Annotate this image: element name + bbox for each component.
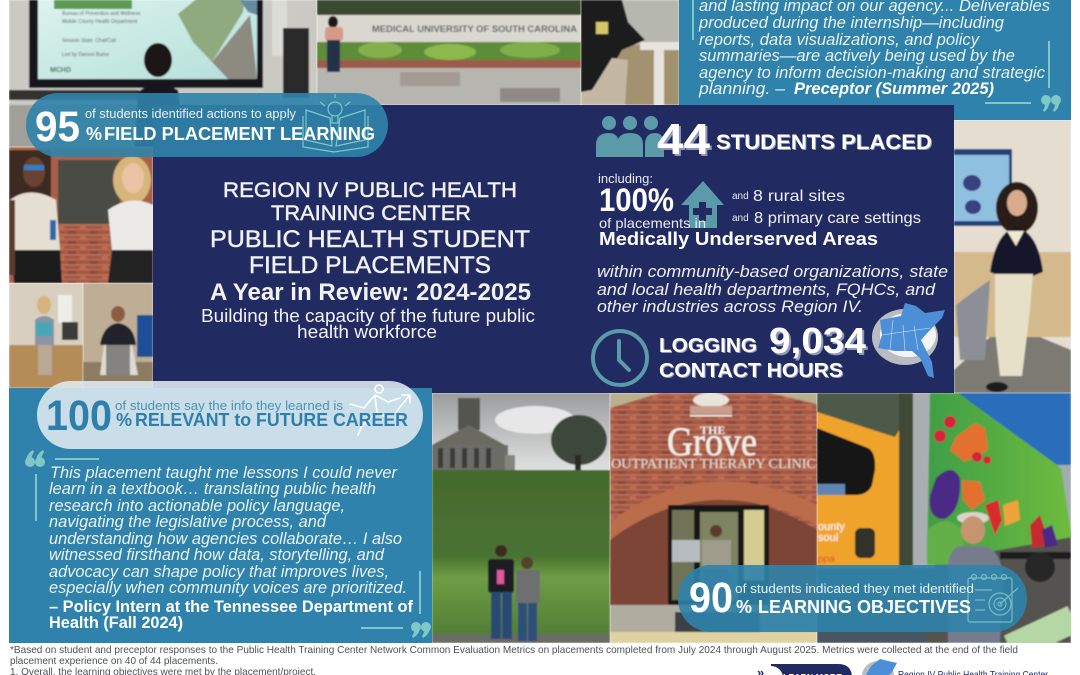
title block: FIELD PLACEMENTS — [249, 252, 491, 279]
stat: 9,034 contact hours: CONTACT HOURS — [659, 360, 843, 382]
title block: health workforce — [297, 322, 437, 342]
text: placement settings: within community-based organizations, state — [597, 262, 948, 281]
photo: woman at an information table — [83, 283, 153, 388]
photo: vegetable mural truck and student — [817, 393, 1071, 643]
stat: 9,034 contact hours — [593, 320, 866, 385]
panel: navy stats and title — [153, 105, 954, 393]
quote text: policy intern: research into actionable policy language, — [49, 496, 345, 515]
panel: student quote — [9, 388, 432, 643]
pill: 90% learning objectives: % — [736, 597, 752, 617]
quote attribution — [49, 597, 413, 632]
quote text: policy intern: understanding how agencies collaborate… I also — [49, 529, 402, 548]
panel: preceptor quote — [679, 0, 1071, 120]
stat: 100% in medically underserved areas: Medically Underserved Areas — [599, 229, 878, 249]
pill: 90% learning objectives: 90 — [689, 574, 733, 622]
photo: student beside a wall screen — [954, 120, 1071, 393]
quote marks and rules — [692, 0, 1061, 112]
pill: 100% relevant to future career — [37, 381, 423, 449]
quote text: preceptor — [698, 0, 1050, 98]
pill: 95% field placement learning: of students identified actions to apply — [85, 106, 296, 121]
photo: Medical University of South Carolina sign: MEDICAL UNIVERSITY OF SOUTH CAROLINA — [372, 24, 578, 34]
pill: 90% learning objectives: of students indicated they met identified — [735, 581, 974, 596]
photo: vegetable mural truck and student: soul — [818, 532, 838, 544]
quote text: preceptor: produced during the internship—including — [698, 13, 1005, 32]
photo: Medical University of South Carolina sign — [317, 0, 581, 105]
photo: presenter in front of a projection screen: Mobile County Health Department — [62, 19, 138, 25]
quote text: preceptor: agency to inform decision-making and strategic — [699, 63, 1045, 82]
stat: 44 students placed: 44 — [657, 115, 711, 164]
stat: 9,034 contact hours: LOGGING — [659, 335, 757, 357]
pill: 100% relevant to future career: of students say the info they learned is — [115, 398, 344, 413]
title block: TRAINING CENTER — [271, 201, 471, 225]
quote text: policy intern: especially when community voices are prioritized. — [49, 578, 407, 597]
quote text: preceptor: planning. – — [698, 79, 786, 98]
pill: 100% relevant to future career: % — [116, 410, 132, 430]
photo: vegetable mural truck and student: ppa — [817, 554, 835, 565]
text: placement settings: and local health departments, FQHCs, and — [597, 280, 936, 299]
quote text: policy intern: learn in a textbook… translating public health — [49, 479, 376, 498]
stat: 44 students placed: STUDENTS PLACED — [716, 131, 932, 154]
quote text: policy intern — [49, 463, 407, 597]
quote text: policy intern: navigating the legislative process, and — [49, 512, 327, 531]
stat: 9,034 contact hours: 9,034 — [769, 320, 866, 361]
icon: runner climbing with arrow — [350, 385, 410, 435]
quote text: preceptor: Preceptor (Summer 2025) — [794, 79, 994, 98]
pill: 100% relevant to future career: RELEVANT to FUTURE CAREER — [135, 410, 408, 430]
quote text: policy intern: This placement taught me lessons I could never — [50, 463, 398, 482]
pill: 95% field placement learning — [26, 93, 388, 157]
icon: checklist with target — [968, 574, 1018, 622]
icon: open book with light bulb — [303, 94, 368, 152]
photo: The Grove Outpatient Therapy Clinic: Grove — [667, 419, 757, 464]
pill: 90% learning objectives: LEARNING OBJECTIVES — [758, 597, 971, 617]
pill: 95% field placement learning: % — [86, 124, 102, 144]
quote attribution: – Policy Intern at the Tennessee Department of — [49, 597, 413, 616]
title block: REGION IV PUBLIC HEALTH — [223, 178, 517, 202]
stat: 100% in medically underserved areas: 100% — [599, 182, 674, 218]
photo: presenter in front of a projection screen: Session Slate: Chat/Call — [62, 38, 116, 44]
photo: presenter in front of a projection screen: MCHD — [50, 67, 71, 74]
photo: The Grove Outpatient Therapy Clinic — [610, 393, 817, 643]
photo: vegetable mural truck and student: ounty — [818, 521, 845, 533]
stat: 100% in medically underserved areas: and — [732, 191, 749, 202]
photo: student holding a book in a room — [9, 283, 83, 388]
text: placement settings: other industries across Region IV. — [597, 297, 863, 316]
quote text: preceptor: reports, data visualizations, and policy — [699, 30, 980, 49]
photo: presenter in front of a projection screen: Bureau of Prevention and Wellness — [62, 11, 141, 17]
photo: student in black shirt outdoors — [581, 0, 679, 105]
pill: 95% field placement learning: 95 — [35, 103, 80, 151]
quote marks and rules — [25, 450, 431, 638]
logo: Region IV Public Health Training Center — [862, 659, 1048, 675]
quote text: policy intern: witnessed firsthand how data, storytelling, and — [49, 545, 385, 564]
photo: Tennessee State Capitol lawn — [432, 393, 610, 643]
title block: A Year in Review: 2024-2025 — [210, 279, 531, 306]
quote attribution: Health (Fall 2024) — [49, 613, 183, 632]
photo: The Grove Outpatient Therapy Clinic: THE — [700, 423, 725, 437]
stat: 100% in medically underserved areas: of placements in — [599, 215, 706, 231]
pill: 100% relevant to future career: 100 — [46, 392, 112, 440]
footnote: *Based on student and preceptor responses to the Public Health Training Center Network Common Evaluation Metrics on placements completed from July 2024 through August 2025. Metrics were collected at the end of the field — [10, 644, 1018, 656]
stat: 100% in medically underserved areas: 8 rural sites — [753, 188, 845, 205]
photo: presenter in front of a projection screen: Led by Damon Burke — [62, 52, 109, 58]
stat: 100% in medically underserved areas: and — [732, 213, 749, 224]
title block: PUBLIC HEALTH STUDENT — [210, 226, 530, 253]
icon: clock — [593, 331, 647, 385]
icon: group of people — [596, 116, 664, 157]
photo: presenter in front of a projection screen — [9, 0, 317, 147]
footnote — [10, 644, 1018, 675]
text: placement settings — [597, 262, 948, 316]
stat: 100% in medically underserved areas: 8 primary care settings — [754, 210, 921, 227]
icon: house with medical cross — [681, 181, 724, 228]
pill: 90% learning objectives — [678, 565, 1027, 632]
stat: 100% in medically underserved areas: including: — [598, 171, 653, 186]
quote text: policy intern: advocacy can shape policy that improves lives, — [49, 562, 389, 581]
photo: two students by a brick wall and plaque — [9, 147, 153, 283]
title block — [201, 178, 535, 342]
photo: The Grove Outpatient Therapy Clinic: OUTPATIENT THERAPY CLINIC — [611, 456, 816, 471]
button: learn more — [757, 664, 852, 675]
pill: 95% field placement learning: FIELD PLACEMENT LEARNING — [104, 124, 375, 144]
icon: map of Region IV states — [872, 303, 945, 378]
footnote: placement experience on 40 of 44 placements. — [10, 655, 218, 667]
title block: Building the capacity of the future public — [201, 306, 535, 326]
quote text: preceptor: summaries—are actively being used by the — [699, 46, 1015, 65]
stat: 100% in medically underserved areas — [598, 171, 921, 249]
stat: 44 students placed — [596, 115, 932, 164]
